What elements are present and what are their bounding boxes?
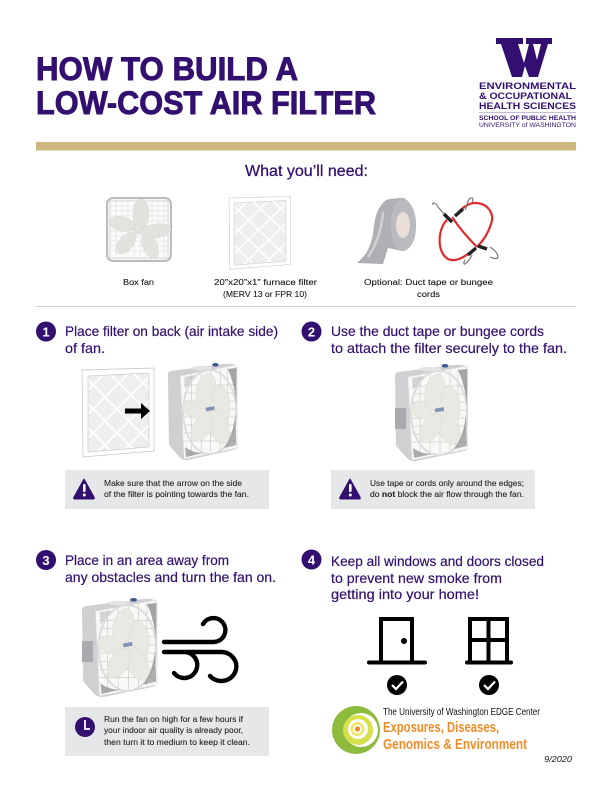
- step 2 instruction: to attach the filter securely to the fan.: [331, 340, 567, 356]
- logo: EDGE Center: [332, 706, 541, 754]
- image: fan with taped filter: [395, 364, 468, 461]
- date: 9/2020: [544, 754, 572, 764]
- badge: step 3: 3: [42, 553, 50, 568]
- image: fan running: [82, 598, 157, 697]
- logo: University of Washington department: [479, 38, 577, 129]
- icon: EDGE spiral: [332, 706, 380, 754]
- callout text: do not block the air flow through the fan.: [370, 490, 524, 499]
- step 1: [36, 322, 278, 509]
- step 4 instruction: getting into your home!: [331, 586, 479, 602]
- callout text: your indoor air quality is already poor,: [104, 726, 243, 735]
- EDGE Center name: The University of Washington EDGE Center: [383, 707, 541, 718]
- item: box fan: [107, 198, 172, 261]
- icon: arrow toward fan: [125, 403, 150, 419]
- department name: & OCCUPATIONAL: [479, 91, 572, 102]
- badge: step 1: [36, 322, 56, 342]
- badge: step 2: 2: [308, 324, 315, 339]
- label: box fan: Box fan: [123, 277, 154, 287]
- step 4 instruction: [331, 553, 544, 602]
- school name: [479, 112, 576, 129]
- label: furnace filter: 20”x20”x1” furnace filter: [214, 277, 317, 287]
- department name: [479, 81, 577, 112]
- EDGE program name: Genomics & Environment: [383, 736, 527, 753]
- label: optional supplies: Optional: Duct tape or bungee: [364, 277, 493, 287]
- step 2: [302, 322, 567, 509]
- school name: SCHOOL OF PUBLIC HEALTH: [479, 115, 576, 122]
- badge: step 3: [36, 550, 56, 570]
- section divider: [36, 306, 576, 307]
- badge: step 4: 4: [308, 552, 316, 567]
- image: filter: [62, 330, 182, 476]
- image: fan: [168, 363, 237, 460]
- badge: step 1: 1: [42, 324, 50, 339]
- callout: tape placement: [331, 470, 535, 509]
- callout text: [370, 479, 524, 499]
- icon: wind: [164, 618, 236, 681]
- step 2 instruction: Use the duct tape or bungee cords: [331, 323, 544, 339]
- step 1 instruction: of fan.: [65, 340, 105, 356]
- callout text: then turn it to medium to keep it clean.: [104, 738, 250, 747]
- icon: window check: [479, 675, 499, 695]
- item: furnace filter: [212, 165, 314, 285]
- callout text: Make sure that the arrow on the side: [104, 479, 243, 488]
- label: optional supplies: [364, 277, 493, 299]
- title: LOW-COST AIR FILTER: [36, 85, 376, 121]
- badge: step 2: [302, 322, 322, 342]
- callout text: [104, 715, 250, 747]
- step 1 instruction: [65, 323, 278, 356]
- title: [36, 51, 376, 121]
- badge: step 4: [302, 550, 322, 570]
- icon: closed window: [467, 619, 511, 662]
- item: bungee cords: [433, 198, 498, 264]
- icon: clock: [75, 717, 95, 737]
- callout text: Run the fan on high for a few hours if: [104, 715, 244, 724]
- gold divider bar: [36, 142, 576, 150]
- step 1 instruction: Place filter on back (air intake side): [65, 323, 278, 339]
- callout: arrow direction: [65, 470, 269, 509]
- EDGE program name: [383, 719, 527, 753]
- callout text: of the filter is pointing towards the fan.: [104, 490, 249, 499]
- step 3: [36, 550, 276, 756]
- step 3 instruction: any obstacles and turn the fan on.: [65, 569, 276, 585]
- EDGE program name: Exposures, Diseases,: [383, 719, 499, 736]
- step 4: [302, 550, 544, 695]
- step 3 instruction: Place in an area away from: [65, 552, 229, 568]
- icon: warning triangle: [74, 479, 94, 499]
- label: optional supplies: cords: [417, 289, 440, 299]
- step 3 instruction: [65, 552, 276, 585]
- step 2 instruction: [331, 323, 567, 356]
- department name: HEALTH SCIENCES: [479, 101, 577, 112]
- label: furnace filter: (MERV 13 or FPR 10): [223, 289, 307, 299]
- school name: UNIVERSITY of WASHINGTON: [479, 123, 576, 129]
- icon: W mark: [496, 38, 552, 77]
- title: HOW TO BUILD A: [36, 51, 298, 87]
- heading: what you'll need: What you’ll need:: [245, 163, 368, 180]
- department name: ENVIRONMENTAL: [479, 81, 576, 92]
- step 4 instruction: to prevent new smoke from: [331, 570, 502, 586]
- icon: closed door: [369, 619, 425, 662]
- item: duct tape: [357, 198, 416, 264]
- step 4 instruction: Keep all windows and doors closed: [331, 553, 544, 569]
- label: furnace filter: [214, 277, 317, 299]
- callout text: Use tape or cords only around the edges;: [370, 479, 524, 488]
- callout: run time: [65, 707, 269, 756]
- icon: door check: [387, 675, 407, 695]
- icon: warning triangle: [340, 479, 360, 499]
- callout text: [104, 479, 249, 499]
